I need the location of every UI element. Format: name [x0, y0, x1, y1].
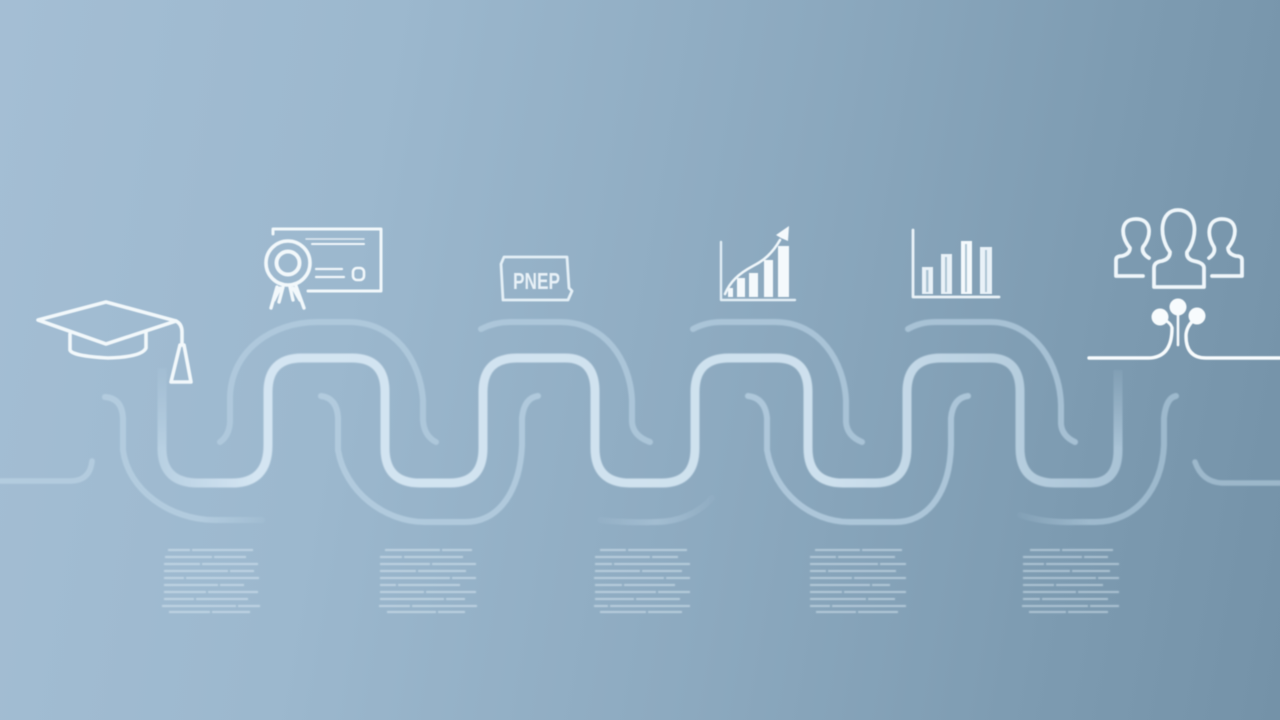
text block 2 (illegible) [379, 550, 477, 612]
icon: rising bar chart with arrow [721, 226, 795, 300]
text block 3 (illegible) [594, 550, 690, 612]
icon: bar chart [913, 230, 999, 297]
text block 1 (illegible) [162, 550, 260, 612]
icon: certificate with seal [266, 229, 381, 308]
main winding path [162, 358, 1118, 483]
upper outer arcs [220, 322, 1075, 442]
icon: PNEP badge: PNEP [513, 268, 560, 294]
lower outer arcs [0, 396, 1280, 522]
text block 5 (illegible) [1022, 550, 1119, 612]
icon: PNEP badge [501, 257, 572, 300]
icon: group of people [1116, 210, 1242, 287]
text block 4 (illegible) [810, 550, 906, 612]
icon: graduation cap [38, 302, 191, 382]
icon: branching connector line with nodes [1089, 298, 1280, 358]
